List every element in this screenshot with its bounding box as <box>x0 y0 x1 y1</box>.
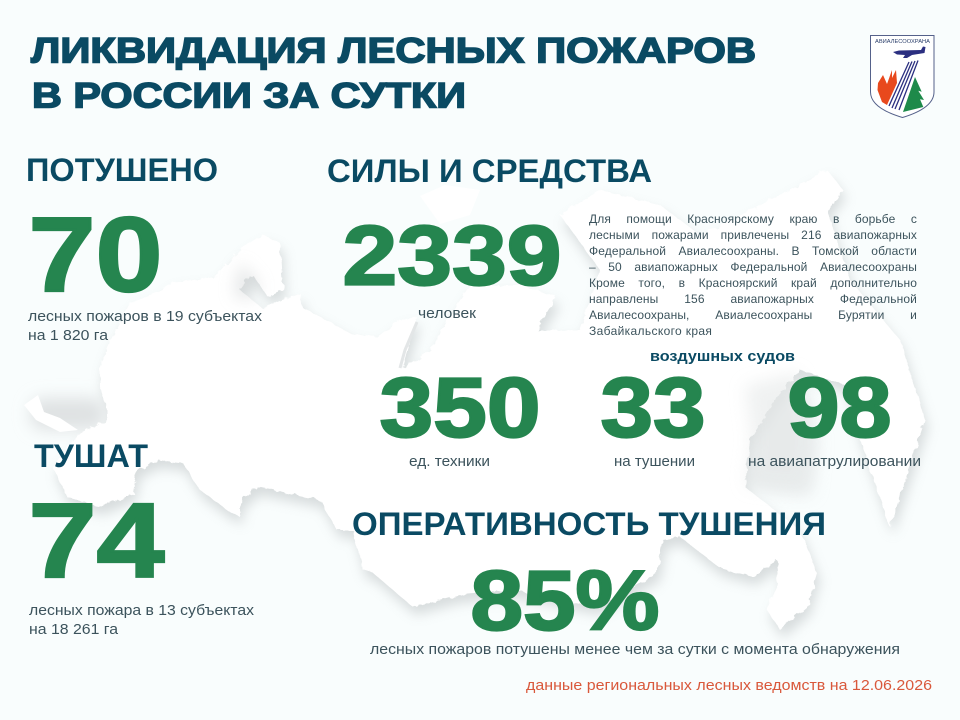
logo: Avialesookhrana shield <box>870 36 934 118</box>
logo: Avialesookhrana shield: АВИАЛЕСООХРАНА <box>875 39 931 45</box>
number: 85 percent: 85% <box>470 554 660 648</box>
paragraph: forces description: Кроме того, в Красноярский край дополнительно <box>589 276 917 290</box>
heading: воздушных судов: воздушных судов <box>650 349 795 365</box>
paragraph: forces description: Федеральной Авиалесоохраны. В Томской области <box>589 244 917 258</box>
paragraph: forces description: направлены 156 авиапожарных Федеральной <box>589 292 917 306</box>
heading: потушено: ПОТУШЕНО <box>26 152 218 188</box>
text: active fires details: на 18 261 га <box>29 622 119 638</box>
number: 2339 people: 2339 <box>342 208 562 302</box>
map of Russia background <box>24 170 928 638</box>
text: extinguished details: на 1 820 га <box>28 328 109 344</box>
text: extinguished details <box>28 309 263 344</box>
text: people caption: человек <box>418 306 477 322</box>
text: patrolling caption: на авиапатрулировании <box>748 454 921 470</box>
text: active fires details <box>29 603 255 638</box>
paragraph: forces description <box>589 212 917 338</box>
paragraph: forces description: – 50 авиапожарных Федеральной Авиалесоохраны <box>589 260 917 274</box>
text: active fires details: лесных пожара в 13 субъектах <box>29 603 255 619</box>
text: data source note: данные региональных лесных ведомств на 12.06.2026 <box>526 678 932 694</box>
heading: силы и средства: СИЛЫ И СРЕДСТВА <box>327 153 652 189</box>
paragraph: forces description: Для помощи Красноярскому краю в борьбе с <box>589 212 917 226</box>
text: extinguishing caption: на тушении <box>614 454 695 470</box>
paragraph: forces description: лесными пожарами привлечены 216 авиапожарных <box>589 228 917 242</box>
number: 350 vehicles: 350 <box>380 360 540 454</box>
number: 70 extinguished: 70 <box>28 196 162 314</box>
title: ЛИКВИДАЦИЯ ЛЕСНЫХ ПОЖАРОВ <box>31 32 756 70</box>
number: 33 aircraft extinguishing: 33 <box>600 360 706 454</box>
paragraph: forces description: Забайкальского края <box>589 324 712 338</box>
text: efficiency caption: лесных пожаров потушены менее чем за сутки с момента обнаружения <box>370 642 900 658</box>
number: 74 being extinguished: 74 <box>28 482 165 600</box>
number: 98 aircraft patrolling: 98 <box>788 360 892 454</box>
title: В РОССИИ ЗА СУТКИ <box>32 76 466 116</box>
title <box>31 32 756 116</box>
text: vehicles caption: ед. техники <box>409 454 490 470</box>
heading: оперативность тушения: ОПЕРАТИВНОСТЬ ТУШЕНИЯ <box>352 506 826 542</box>
text: extinguished details: лесных пожаров в 19 субъектах <box>28 309 263 325</box>
heading: тушат: ТУШАТ <box>34 438 148 474</box>
paragraph: forces description: Авиалесоохраны, Авиалесоохраны Бурятии и <box>589 308 917 322</box>
